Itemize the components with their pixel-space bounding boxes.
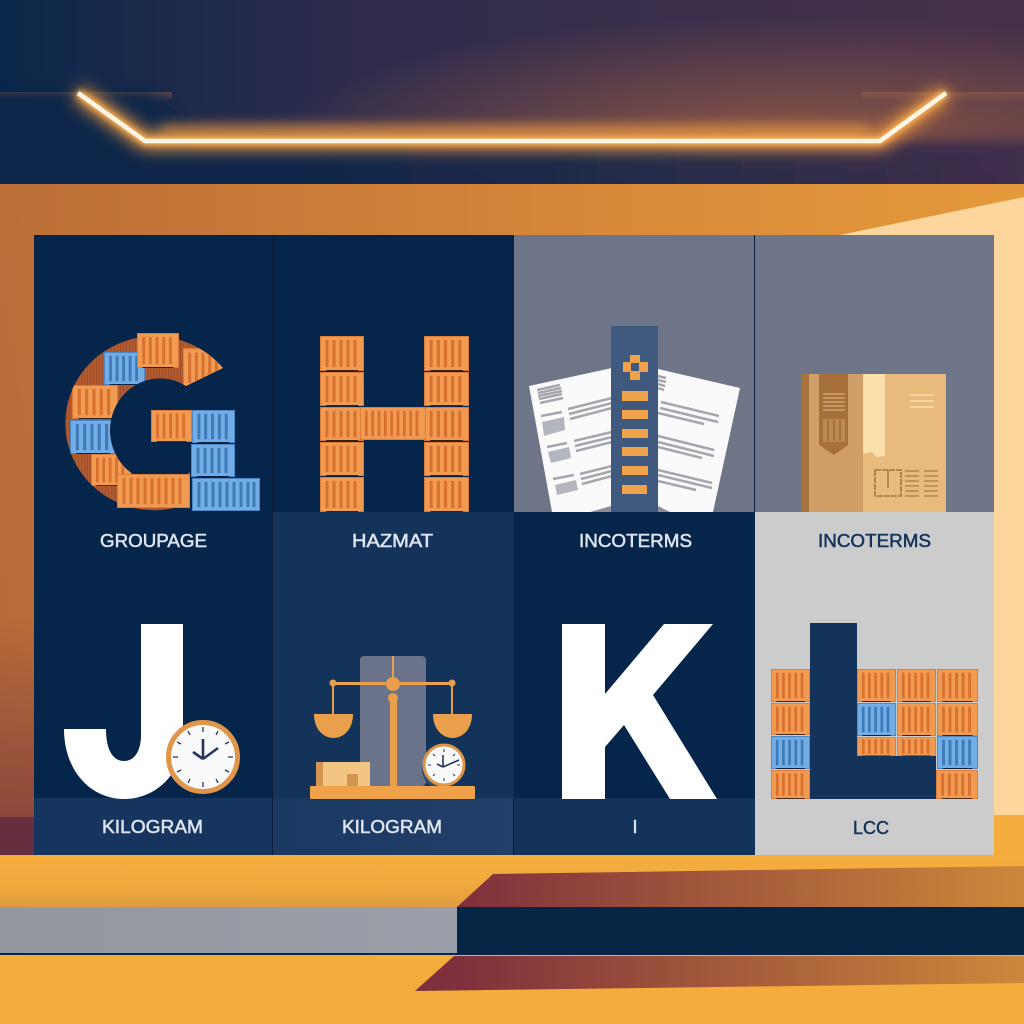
back wall (0, 184, 1024, 856)
panel H: hazmat (272, 235, 514, 855)
icon: scale with box and clock (310, 656, 475, 799)
letter J (64, 624, 183, 799)
letter K (562, 624, 717, 799)
background ceiling (0, 0, 1024, 220)
icon: cardboard box (801, 374, 946, 512)
glowing ceiling light line (78, 93, 946, 141)
icon: barcode strip (611, 326, 658, 512)
label: kilogram: KILOGRAM (102, 817, 203, 837)
panel L: incoterms box and LCC (754, 235, 994, 855)
label: hazmat: HAZMAT (352, 531, 433, 551)
label: groupage: GROUPAGE (100, 531, 207, 551)
icon: documents (529, 368, 740, 512)
label: incoterms: INCOTERMS (579, 531, 692, 551)
letter G of containers (65, 333, 260, 511)
icon: clock (168, 722, 238, 792)
label: incoterms box: INCOTERMS (818, 531, 931, 551)
label: kilogram second: KILOGRAM (342, 817, 442, 837)
panel G: groupage (34, 235, 273, 855)
panel I: incoterms documents (514, 235, 755, 855)
letter L with containers (771, 623, 978, 799)
label: I: I (632, 817, 638, 837)
letter H of containers (320, 336, 469, 512)
floor and steps (0, 855, 1024, 1024)
label: LCC: LCC (853, 818, 889, 838)
